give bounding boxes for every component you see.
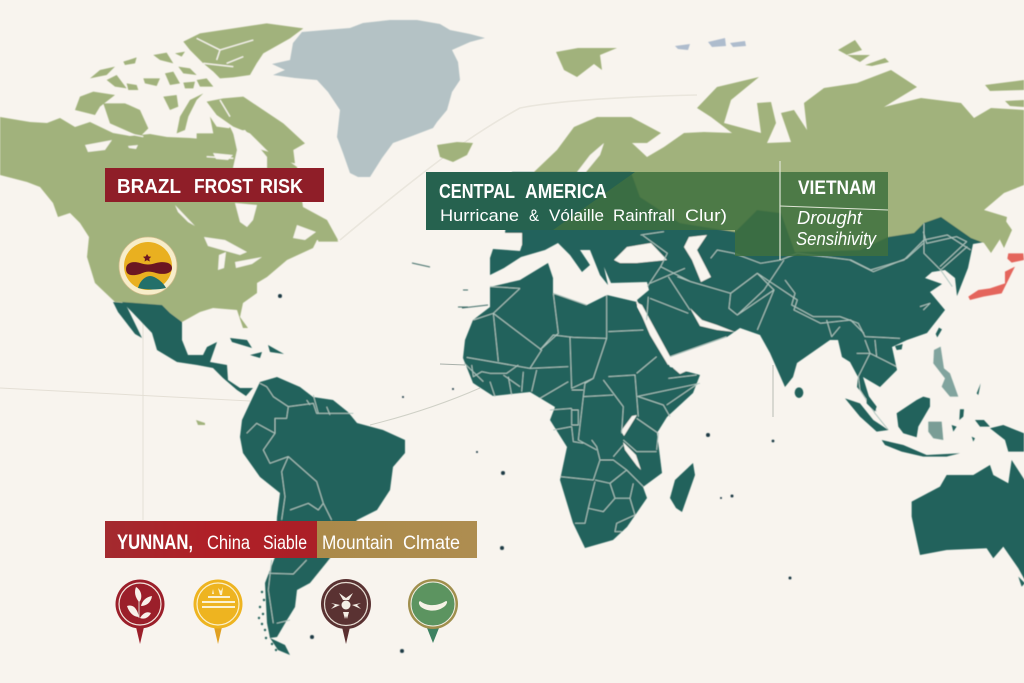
Japan highlighted in red — [968, 253, 1024, 300]
label panel: Yunnan stable mountain climate: Mountain — [322, 533, 393, 554]
subheading: hurricane risk — [440, 206, 727, 225]
label panel: Central America / Vietnam — [426, 161, 888, 260]
icon: green pin — [408, 579, 458, 643]
label panel: Yunnan stable mountain climate: Siable — [263, 533, 307, 554]
heading: Central America — [439, 181, 607, 203]
label panel: Yunnan stable mountain climate: Clmate — [403, 533, 460, 554]
landmass: Eurasia base — [490, 172, 985, 412]
Chile coastline speckle — [258, 591, 290, 655]
landmass: Mexico and Central America — [113, 302, 284, 396]
Baltic Sea — [577, 143, 604, 172]
landmass: Greenland — [272, 20, 485, 177]
label panel: Yunnan stable mountain climate — [105, 521, 477, 558]
subheading: drought sensitivity: Sensihivity — [796, 229, 877, 249]
country borders: East Asia — [785, 232, 967, 430]
icon: yellow pin — [194, 580, 242, 644]
subheading: hurricane risk: Vólaille — [549, 206, 604, 225]
scattered dots — [278, 263, 792, 653]
icon: red leaf pin — [116, 580, 164, 644]
icon: brown pin — [321, 579, 371, 644]
label panel: Brazil frost risk: FROST — [194, 176, 253, 198]
island: Madagascar — [670, 463, 695, 512]
country borders: South America — [247, 383, 353, 623]
label panel: Yunnan stable mountain climate: YUNNAN, — [117, 531, 193, 554]
subheading: hurricane risk: & — [529, 206, 540, 225]
subheading: drought sensitivity: Drought — [797, 208, 863, 228]
seas and lakes — [504, 233, 735, 470]
blue Arctic islets — [675, 38, 746, 50]
label panel: Brazil frost risk — [105, 168, 324, 202]
landmass: North America — [0, 23, 338, 328]
landmass: South America — [240, 377, 405, 638]
subheading: hurricane risk: Rainfrall — [613, 206, 675, 225]
subheading: hurricane risk: Clur) — [685, 206, 727, 225]
Arctic islands — [437, 40, 1024, 248]
heading: Vietnam: VIETNAM — [798, 178, 876, 199]
subheading: drought sensitivity — [796, 208, 877, 249]
Hudson Bay and Great Lakes — [85, 130, 316, 270]
heading: Central America: CENTPAL — [439, 181, 515, 203]
landmass: Africa — [463, 263, 700, 548]
icon: small green island — [196, 420, 205, 425]
label panel: Brazil frost risk: RISK — [260, 176, 303, 198]
icon: frost badge — [119, 237, 177, 295]
subheading: hurricane risk: Hurricane — [440, 206, 519, 225]
label panel: Brazil frost risk: BRAZL — [117, 176, 181, 198]
country borders: Asia — [641, 223, 971, 333]
label panel: Yunnan stable mountain climate: China — [207, 533, 250, 554]
country borders: Africa — [464, 268, 727, 532]
heading: Central America: AMERICA — [525, 181, 607, 203]
islands: Southeast Asia and Oceania — [795, 328, 1024, 587]
landmass: Russia and Scandinavia — [534, 70, 1024, 253]
divider lines — [780, 161, 888, 260]
Arctic channels — [127, 38, 253, 158]
